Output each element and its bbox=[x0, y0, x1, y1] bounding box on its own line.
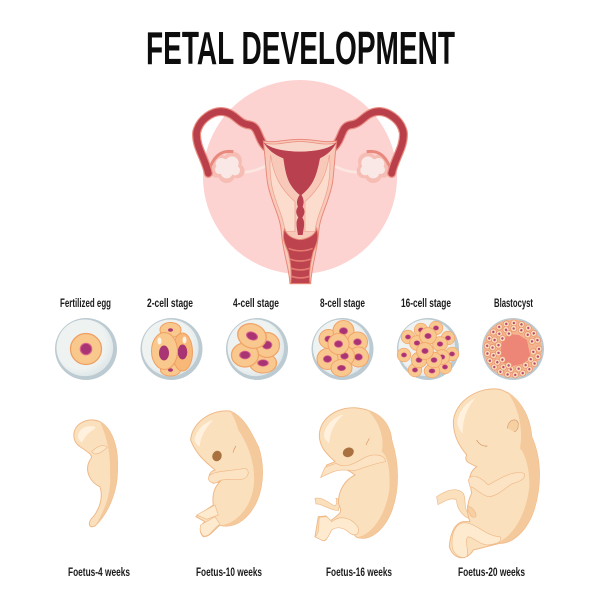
icon: uterine wall inner band bbox=[270, 155, 330, 232]
label: Blastocyst: Blastocyst bbox=[494, 298, 533, 310]
icon: upper fundus bbox=[264, 142, 336, 152]
icon: fertilized egg bbox=[55, 318, 117, 380]
label: 2-cell stage: 2-cell stage bbox=[147, 298, 193, 310]
icon: foetus 20 weeks bbox=[437, 389, 539, 558]
panel: early cell stages bbox=[55, 298, 544, 380]
label: 16-cell stage: 16-cell stage bbox=[401, 298, 451, 310]
label: 8-cell stage: 8-cell stage bbox=[320, 298, 365, 310]
panel: uterus diagram bbox=[197, 80, 403, 284]
panel: foetus stages bbox=[68, 389, 539, 579]
uterus illustration bbox=[197, 112, 403, 284]
icon: 4-cell stage bbox=[226, 318, 288, 380]
icon: 8-cell stage bbox=[312, 318, 374, 380]
icon: 2-cell stage bbox=[140, 318, 202, 380]
icon: blastocyst bbox=[482, 318, 544, 380]
icon: right fallopian tube bbox=[333, 112, 403, 173]
icon: vaginal folds bbox=[289, 248, 313, 278]
icon: 16-cell stage bbox=[397, 318, 459, 380]
label: Foetus-16 weeks: Foetus-16 weeks bbox=[326, 565, 392, 579]
icon: vaginal canal bbox=[283, 228, 318, 284]
label: 4-cell stage: 4-cell stage bbox=[233, 298, 279, 310]
icon: foetus 4 weeks bbox=[74, 420, 117, 527]
icon: cervical canal bbox=[296, 193, 304, 235]
icon: right ovary core bbox=[360, 156, 385, 178]
icon: left ovary core bbox=[215, 156, 240, 178]
pink circle backdrop bbox=[203, 80, 397, 274]
icon: right ovary bbox=[357, 152, 390, 183]
label: Foetus-4 weeks: Foetus-4 weeks bbox=[68, 565, 130, 579]
icon: uterine cavity bbox=[263, 142, 337, 196]
icon: foetus 16 weeks bbox=[315, 408, 397, 541]
label: Foetus-20 weeks: Foetus-20 weeks bbox=[458, 565, 525, 579]
icon: uterus outer wall bbox=[263, 139, 337, 284]
icon: left ovary bbox=[210, 152, 245, 183]
label: Foetus-10 weeks: Foetus-10 weeks bbox=[196, 565, 262, 579]
icon: ligaments bbox=[242, 165, 358, 172]
icon: foetus 10 weeks bbox=[191, 411, 262, 537]
label: Fertilized egg: Fertilized egg bbox=[60, 298, 111, 310]
icon: left fallopian tube bbox=[197, 112, 267, 173]
